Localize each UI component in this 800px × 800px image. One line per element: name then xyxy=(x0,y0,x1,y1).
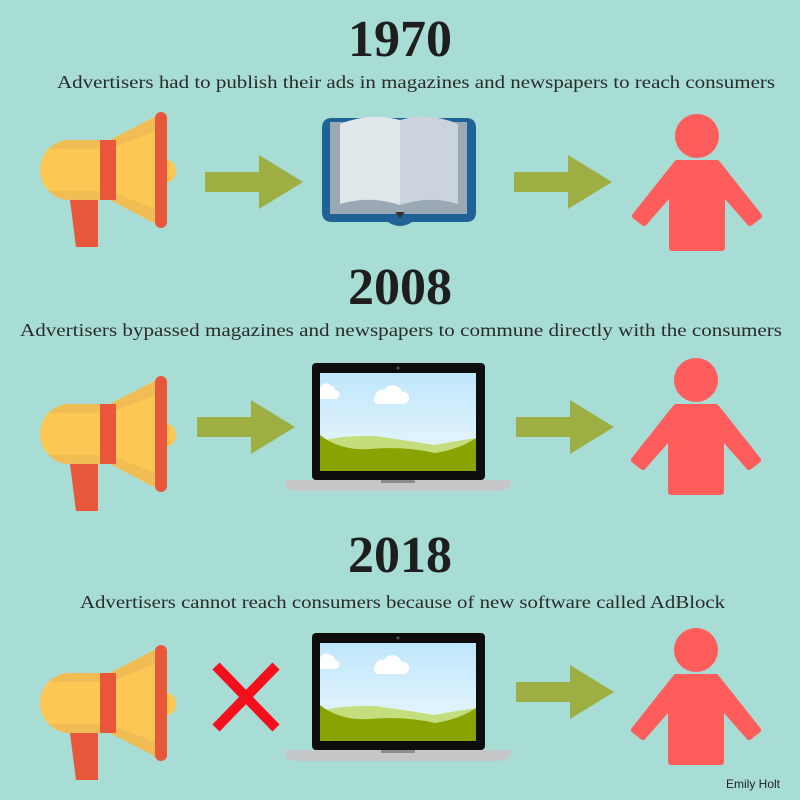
text: 2018 description: Advertisers cannot reach consumers because of new software called AdBlock xyxy=(80,592,725,612)
icon: laptop 2008 xyxy=(285,363,512,491)
icon: person 1970 xyxy=(635,114,759,248)
title: 2018: 2018 xyxy=(348,527,452,584)
icon: book xyxy=(322,117,476,226)
icon: person 2008 xyxy=(634,358,758,492)
icon: megaphone 2018 xyxy=(40,645,176,780)
text: 2008 description: Advertisers bypassed magazines and newspapers to commune directly with the consumers xyxy=(20,320,782,340)
arrow: laptop to person xyxy=(516,400,614,454)
arrow: megaphone to laptop xyxy=(197,400,295,454)
icon: megaphone 2008 xyxy=(40,376,176,511)
text: 1970 description: Advertisers had to publish their ads in magazines and newspapers to reach consumers xyxy=(57,72,775,92)
icon: person 2018 xyxy=(634,628,758,762)
title: 1970: 1970 xyxy=(348,11,452,68)
icon: red X xyxy=(216,666,276,728)
arrow: book to person xyxy=(514,155,612,209)
title: 2008: 2008 xyxy=(348,259,452,316)
icon: laptop 2018 xyxy=(285,633,512,761)
arrow: megaphone to book xyxy=(205,155,303,209)
credit: author: Emily Holt xyxy=(726,777,781,791)
icon: megaphone 1970 xyxy=(40,112,176,247)
arrow: laptop to person 2018 xyxy=(516,665,614,719)
